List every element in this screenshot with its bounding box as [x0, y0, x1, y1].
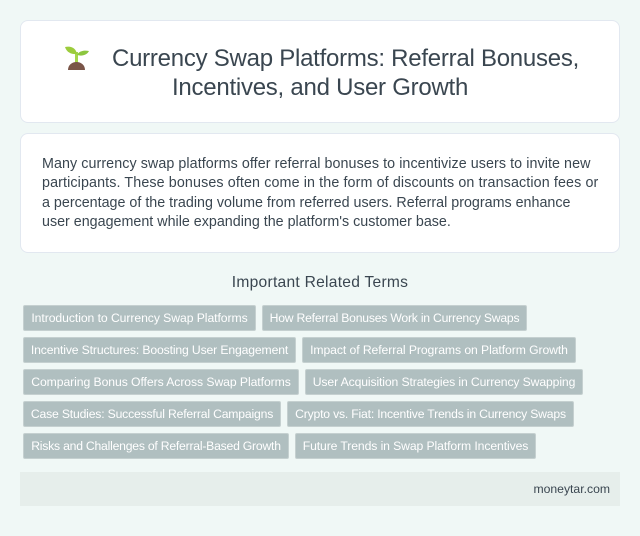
- tag: Case Studies: Successful Referral Campaigns: [31, 407, 273, 421]
- tag: [23, 369, 299, 395]
- tag: Comparing Bonus Offers Across Swap Platforms: [31, 375, 291, 389]
- tag: [302, 337, 576, 363]
- icon: seedling: [65, 46, 89, 70]
- title: [112, 45, 579, 101]
- title: Currency Swap Platforms: Referral Bonuses,: [112, 45, 579, 72]
- header card: [20, 20, 620, 123]
- tag: Risks and Challenges of Referral-Based Growth: [31, 439, 281, 453]
- intro paragraph: a percentage of the trading volume from referred users. Referral programs enhance: [42, 195, 570, 211]
- title: Incentives, and User Growth: [172, 74, 468, 101]
- tag: How Referral Bonuses Work in Currency Swaps: [270, 311, 519, 325]
- intro paragraph: user engagement while expanding the platform's customer base.: [42, 214, 451, 230]
- intro text card: [20, 133, 620, 253]
- section heading: Important Related Terms: [232, 274, 408, 291]
- tag: [23, 433, 289, 459]
- tag: Crypto vs. Fiat: Incentive Trends in Currency Swaps: [295, 407, 566, 421]
- tag: Introduction to Currency Swap Platforms: [31, 311, 248, 325]
- tag: [287, 401, 574, 427]
- tag: [262, 305, 527, 331]
- footer bar: [20, 472, 620, 506]
- intro paragraph: participants. These bonuses often come in the form of discounts on transaction fees or: [42, 175, 598, 191]
- tag: [23, 337, 296, 363]
- footer source: moneytar.com: [533, 482, 610, 496]
- tag: [23, 401, 281, 427]
- tag: [305, 369, 583, 395]
- tag: Impact of Referral Programs on Platform Growth: [310, 343, 568, 357]
- tag: Incentive Structures: Boosting User Engagement: [31, 343, 288, 357]
- intro paragraph: Many currency swap platforms offer referral bonuses to incentivize users to invite new: [42, 156, 590, 172]
- intro paragraph: [42, 156, 598, 230]
- tag: [295, 433, 536, 459]
- tag: Future Trends in Swap Platform Incentives: [303, 439, 528, 453]
- tag list: [23, 305, 583, 459]
- tag: [23, 305, 256, 331]
- tag: User Acquisition Strategies in Currency Swapping: [313, 375, 575, 389]
